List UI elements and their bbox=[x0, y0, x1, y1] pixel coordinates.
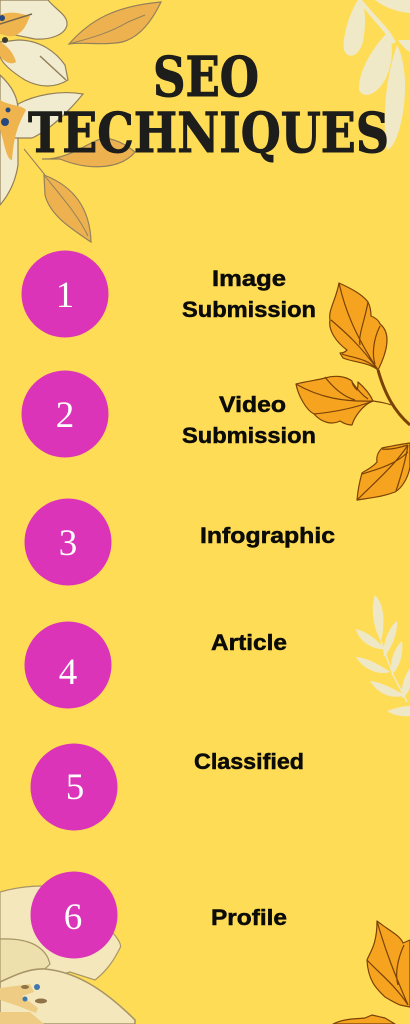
list item 6: 6 bbox=[64, 897, 82, 938]
icon: bottom-left flower bbox=[0, 886, 135, 1024]
list item 1 bbox=[22, 250, 316, 338]
icon: top-right pale foliage bbox=[344, 0, 410, 150]
list item 1: Image bbox=[212, 266, 286, 291]
list item 1: Submission bbox=[182, 297, 316, 322]
list item 2: Submission bbox=[182, 423, 316, 448]
list item 2 bbox=[22, 370, 316, 458]
list item 1: 1 bbox=[56, 275, 74, 316]
icon: right autumn branch bbox=[296, 283, 410, 500]
list item 2: Video bbox=[219, 392, 286, 417]
list item 4 bbox=[24, 622, 287, 708]
list item 5 bbox=[30, 744, 304, 830]
icon: bottom-right autumn leaves bbox=[333, 921, 410, 1024]
list item 4: 4 bbox=[59, 652, 77, 693]
list item 3: 3 bbox=[59, 523, 77, 564]
list item 5: Classified bbox=[194, 749, 304, 774]
list item 4: Article bbox=[211, 630, 287, 655]
title: SEO bbox=[153, 44, 259, 109]
list item 5: 5 bbox=[66, 767, 84, 808]
list item 3 bbox=[24, 498, 335, 586]
icon: top-left flower and leaves bbox=[0, 0, 161, 242]
list item 6: Profile bbox=[211, 905, 287, 930]
title bbox=[28, 44, 389, 165]
list item 6 bbox=[30, 872, 287, 958]
list item 2: 2 bbox=[56, 395, 74, 436]
icon: pale sprig bbox=[356, 595, 410, 716]
list item 3: Infographic bbox=[200, 523, 335, 548]
